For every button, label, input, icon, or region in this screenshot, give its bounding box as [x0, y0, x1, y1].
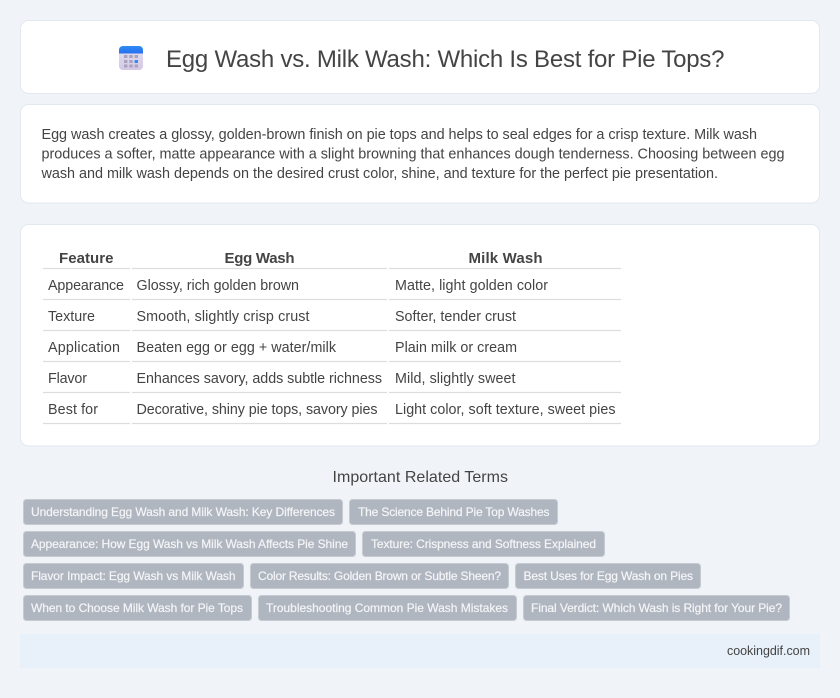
tag: Texture: Crispness and Softness Explained	[371, 537, 596, 551]
tag	[24, 596, 252, 620]
tag: Flavor Impact: Egg Wash vs Milk Wash	[31, 569, 236, 583]
tag	[362, 532, 604, 556]
tag	[24, 564, 244, 588]
row: flavor: Mild, slightly sweet	[395, 371, 516, 387]
row: texture: Texture	[48, 309, 95, 325]
table header	[59, 250, 542, 267]
title: Egg Wash vs. Milk Wash: Which Is Best for Pie Tops?	[166, 46, 724, 73]
tag: Appearance: How Egg Wash vs Milk Wash Affects Pie Shine	[31, 537, 348, 551]
row: appearance: Glossy, rich golden brown	[136, 278, 299, 294]
table header: Feature	[59, 250, 114, 267]
tag: Final Verdict: Which Wash is Right for Your Pie?	[531, 601, 782, 615]
tag	[516, 564, 700, 588]
heading: related terms: Important Related Terms	[332, 469, 508, 486]
tag: Color Results: Golden Brown or Subtle Sheen?	[258, 569, 501, 583]
row: best for: Decorative, shiny pie tops, savory pies	[136, 402, 378, 418]
row: texture	[48, 309, 516, 325]
tag	[24, 532, 356, 556]
row: appearance	[48, 278, 548, 294]
row: application	[48, 340, 517, 356]
footer	[20, 634, 820, 668]
row: flavor	[48, 371, 516, 387]
row: best for	[48, 402, 616, 418]
tag	[524, 596, 790, 620]
row: application: Plain milk or cream	[395, 340, 517, 356]
table header: Milk Wash	[468, 250, 542, 267]
tag	[250, 564, 508, 588]
row: appearance: Appearance	[48, 278, 124, 294]
tag: Troubleshooting Common Pie Wash Mistakes	[266, 601, 508, 615]
row: best for: Light color, soft texture, sweet pies	[395, 402, 616, 418]
tag	[24, 500, 342, 524]
tag: When to Choose Milk Wash for Pie Tops	[31, 601, 243, 615]
row: application: Application	[48, 340, 120, 356]
tag	[258, 596, 516, 620]
row: texture: Smooth, slightly crisp crust	[136, 309, 310, 325]
row: flavor: Enhances savory, adds subtle richness	[136, 371, 382, 387]
row: flavor: Flavor	[48, 371, 87, 387]
tag: Best Uses for Egg Wash on Pies	[524, 569, 693, 583]
panel: comparison table	[20, 224, 820, 446]
intro text	[40, 127, 784, 182]
tag	[350, 500, 558, 524]
row: best for: Best for	[48, 402, 98, 418]
footer source: cookingdif.com	[727, 644, 810, 658]
panel: introduction	[20, 104, 820, 203]
intro text: Egg wash creates a glossy, golden-brown finish on pie tops and helps to seal edges for a crisp texture. Milk wash	[42, 127, 757, 143]
row: texture: Softer, tender crust	[395, 309, 516, 325]
intro text: wash and milk wash depends on the desired crust color, shine, and texture for the perfect pie presentation.	[40, 166, 718, 182]
related term tags	[24, 500, 790, 620]
row: appearance: Matte, light golden color	[395, 278, 548, 294]
row: application: Beaten egg or egg + water/milk	[136, 340, 337, 356]
header panel	[20, 20, 820, 94]
intro text: produces a softer, matte appearance with a slight browning that enhances dough tenderness. Choosing between egg	[42, 146, 784, 162]
icon: calendar	[119, 46, 143, 70]
tag: The Science Behind Pie Top Washes	[358, 505, 550, 519]
table header: Egg Wash	[224, 250, 294, 267]
tag: Understanding Egg Wash and Milk Wash: Key Differences	[31, 505, 335, 519]
